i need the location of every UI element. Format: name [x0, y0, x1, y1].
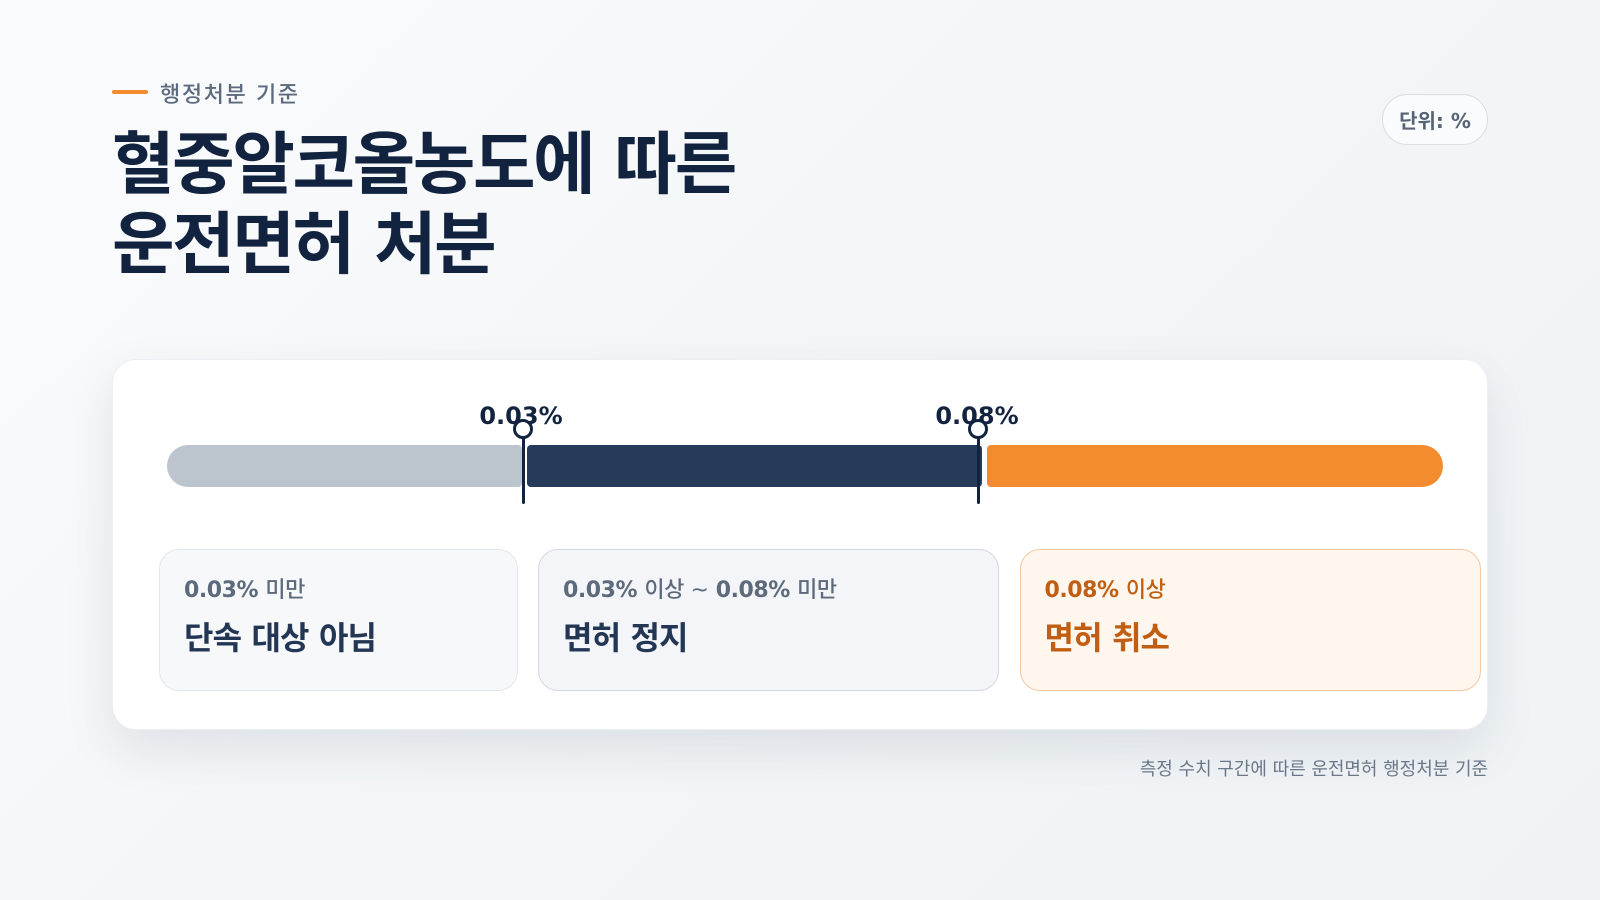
- threshold label 0.08%: 0.08%: [935, 402, 1019, 430]
- eyebrow accent dash: [112, 90, 148, 94]
- category card: license revocation: [1020, 549, 1481, 691]
- title: [112, 126, 735, 285]
- eyebrow text: 행정처분 기준: [160, 83, 300, 108]
- threshold marker 0.08%: [968, 419, 988, 504]
- bar segment: below 0.03%: [167, 445, 522, 487]
- outcome: 면허 정지: [563, 619, 688, 657]
- title: 혈중알코올농도에 따른: [112, 126, 735, 205]
- threshold label 0.03%: 0.03%: [479, 402, 563, 430]
- outcome: 단속 대상 아님: [184, 619, 376, 657]
- threshold marker 0.03%: [513, 419, 533, 504]
- range label: 0.03% 미만: [184, 578, 305, 603]
- range label: 0.03% 이상 ~ 0.08% 미만: [563, 578, 837, 603]
- unit badge: 단위: %: [1399, 109, 1471, 133]
- category card: no enforcement: [159, 549, 518, 691]
- title: 운전면허 처분: [112, 206, 494, 285]
- outcome: 면허 취소: [1044, 619, 1169, 657]
- bar segment: 0.03% to 0.08%: [526, 445, 982, 487]
- range label: 0.08% 이상: [1044, 578, 1165, 603]
- bar segment: 0.08% and above: [987, 445, 1443, 487]
- panel: main card: [112, 359, 1488, 730]
- footnote: 측정 수치 구간에 따른 운전면허 행정처분 기준: [1140, 759, 1488, 780]
- category card: license suspension: [538, 549, 999, 691]
- unit badge: [1382, 94, 1488, 145]
